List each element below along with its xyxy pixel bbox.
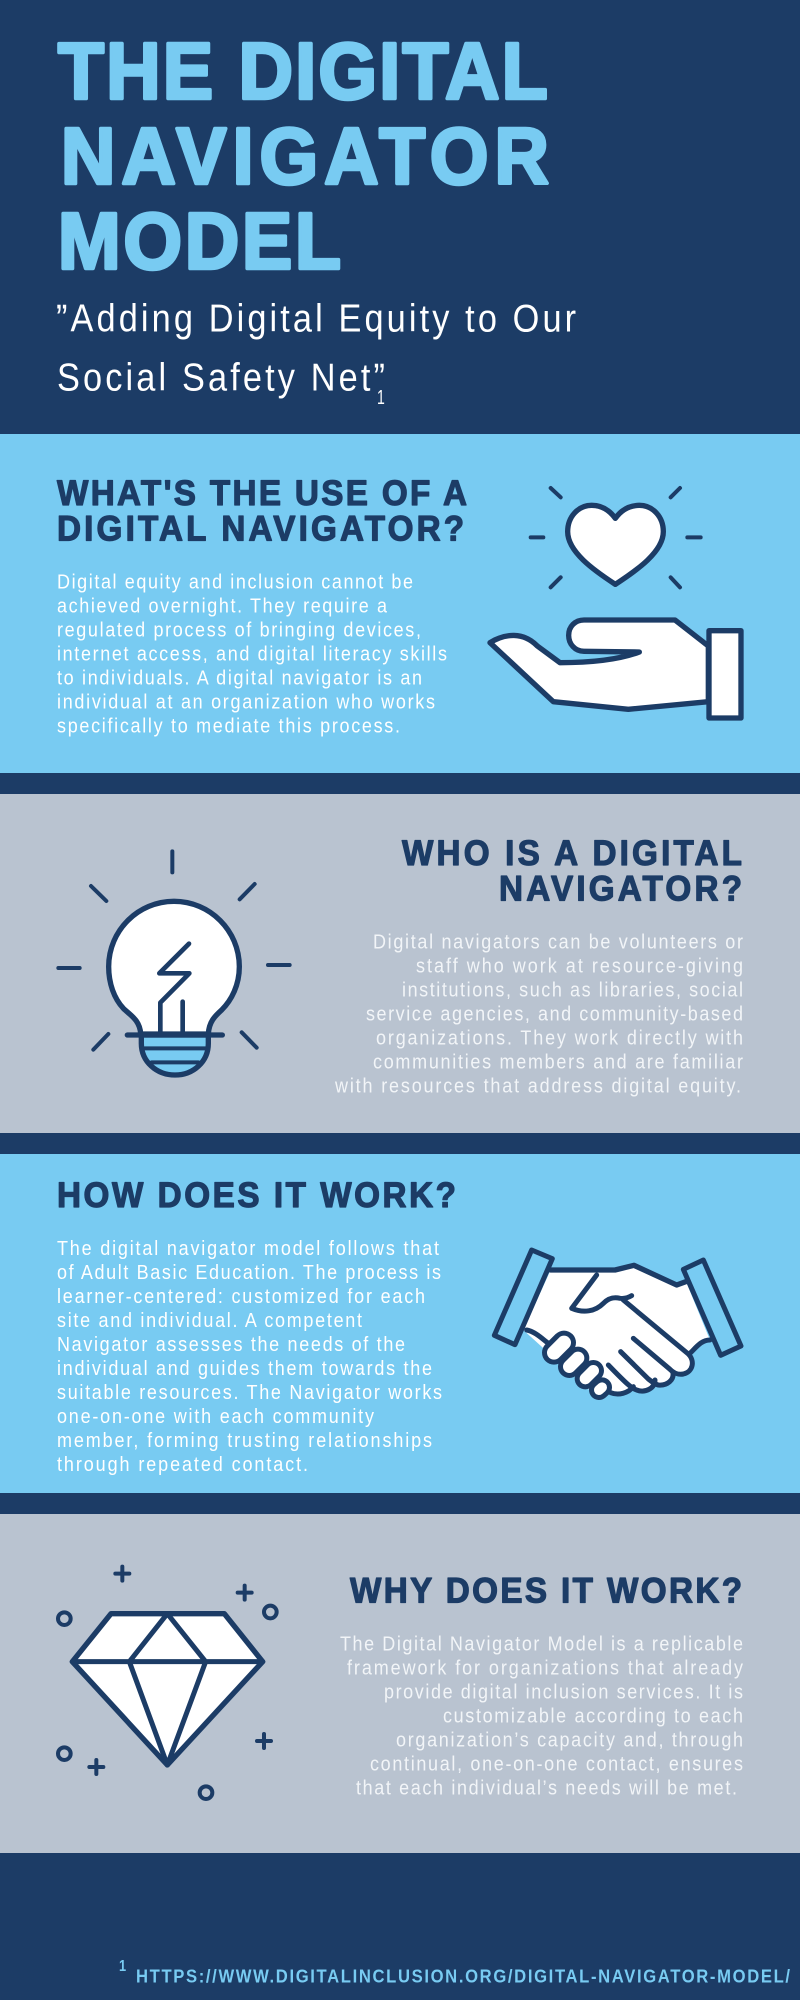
body text: how does it work: learner-centered: customized for each — [57, 1286, 425, 1308]
footnote: 1 — [119, 1958, 126, 1975]
heading: how does it work: HOW DOES IT WORK? — [57, 1176, 456, 1215]
title: NAVIGATOR — [61, 112, 549, 201]
body text: what's the use: Digital equity and inclusion cannot be — [57, 572, 413, 594]
body text: how does it work: individual and guides them towards the — [57, 1358, 432, 1380]
body text: how does it work: through repeated contact. — [57, 1454, 308, 1476]
body text: how does it work — [57, 1238, 442, 1476]
heading: who is: NAVIGATOR? — [499, 870, 742, 909]
body text: how does it work: Navigator assesses the needs of the — [57, 1334, 405, 1356]
heading: who is — [402, 834, 742, 909]
body text: why does it work — [340, 1634, 743, 1800]
body text: who is: institutions, such as libraries, social — [402, 980, 743, 1002]
body text: what's the use: internet access, and digital literacy skills — [57, 644, 447, 666]
title: THE DIGITAL — [58, 27, 548, 116]
icon: light bulb — [58, 851, 290, 1075]
body text: why does it work: provide digital inclusion services. It is — [384, 1682, 743, 1704]
icon: handshake — [494, 1250, 741, 1397]
body text: why does it work: organization’s capacity and, through — [396, 1730, 743, 1752]
body text: what's the use: specifically to mediate this process. — [57, 716, 400, 738]
subtitle: ”Adding Digital Equity to Our — [56, 296, 576, 340]
header: title and subtitle — [56, 27, 576, 409]
body text: how does it work: of Adult Basic Education. The process is — [57, 1262, 441, 1284]
title: MODEL — [58, 197, 341, 286]
body text: why does it work: framework for organizations that already — [347, 1658, 743, 1680]
subtitle — [56, 296, 576, 409]
heading: what's the use: WHAT'S THE USE OF A — [57, 474, 467, 513]
body text: why does it work: continual, one-on-one contact, ensures — [370, 1754, 743, 1776]
body text: how does it work: site and individual. A competent — [57, 1310, 363, 1332]
subtitle: Social Safety Net” — [57, 355, 385, 399]
icon: diamond — [58, 1567, 277, 1799]
body text: who is: communities members and are familiar — [373, 1052, 744, 1074]
footnote: HTTPS://WWW.DIGITALINCLUSION.ORG/DIGITAL-NAVIGATOR-MODEL/ — [136, 1966, 790, 1987]
body text: why does it work: that each individual’s needs will be met. — [356, 1778, 737, 1800]
body text: who is: service agencies, and community-based — [366, 1004, 743, 1026]
subtitle: 1 — [377, 385, 385, 409]
body text: how does it work: one-on-one with each community — [57, 1406, 374, 1428]
panel: how does it work — [0, 1154, 800, 1493]
body text: how does it work: The digital navigator model follows that — [57, 1238, 440, 1260]
heading: who is: WHO IS A DIGITAL — [402, 834, 742, 873]
body text: what's the use — [57, 572, 447, 738]
icon: hand holding heart — [490, 488, 741, 718]
body text: how does it work: member, forming trusting relationships — [57, 1430, 432, 1452]
panel: what's the use — [0, 434, 800, 773]
body text: what's the use: achieved overnight. They require a — [57, 596, 387, 618]
body text: who is — [334, 932, 744, 1098]
body text: why does it work: The Digital Navigator Model is a replicable — [340, 1634, 743, 1656]
body text: who is: with resources that address digital equity. — [334, 1076, 741, 1098]
heading: why does it work: WHY DOES IT WORK? — [350, 1572, 742, 1611]
body text: who is: staff who work at resource-giving — [416, 956, 743, 978]
heading: what's the use — [57, 474, 467, 549]
panel: why does it work — [0, 1514, 800, 1853]
title — [58, 27, 549, 286]
body text: what's the use: regulated process of bringing devices, — [57, 620, 421, 642]
body text: what's the use: to individuals. A digital navigator is an — [57, 668, 422, 690]
panel: who is a digital navigator — [0, 794, 800, 1133]
body text: what's the use: individual at an organization who works — [57, 692, 435, 714]
body text: who is: organizations. They work directly with — [376, 1028, 743, 1050]
heading: what's the use: DIGITAL NAVIGATOR? — [57, 510, 464, 549]
body text: who is: Digital navigators can be volunteers or — [373, 932, 744, 954]
body text: how does it work: suitable resources. The Navigator works — [57, 1382, 442, 1404]
body text: why does it work: customizable according to each — [443, 1706, 743, 1728]
